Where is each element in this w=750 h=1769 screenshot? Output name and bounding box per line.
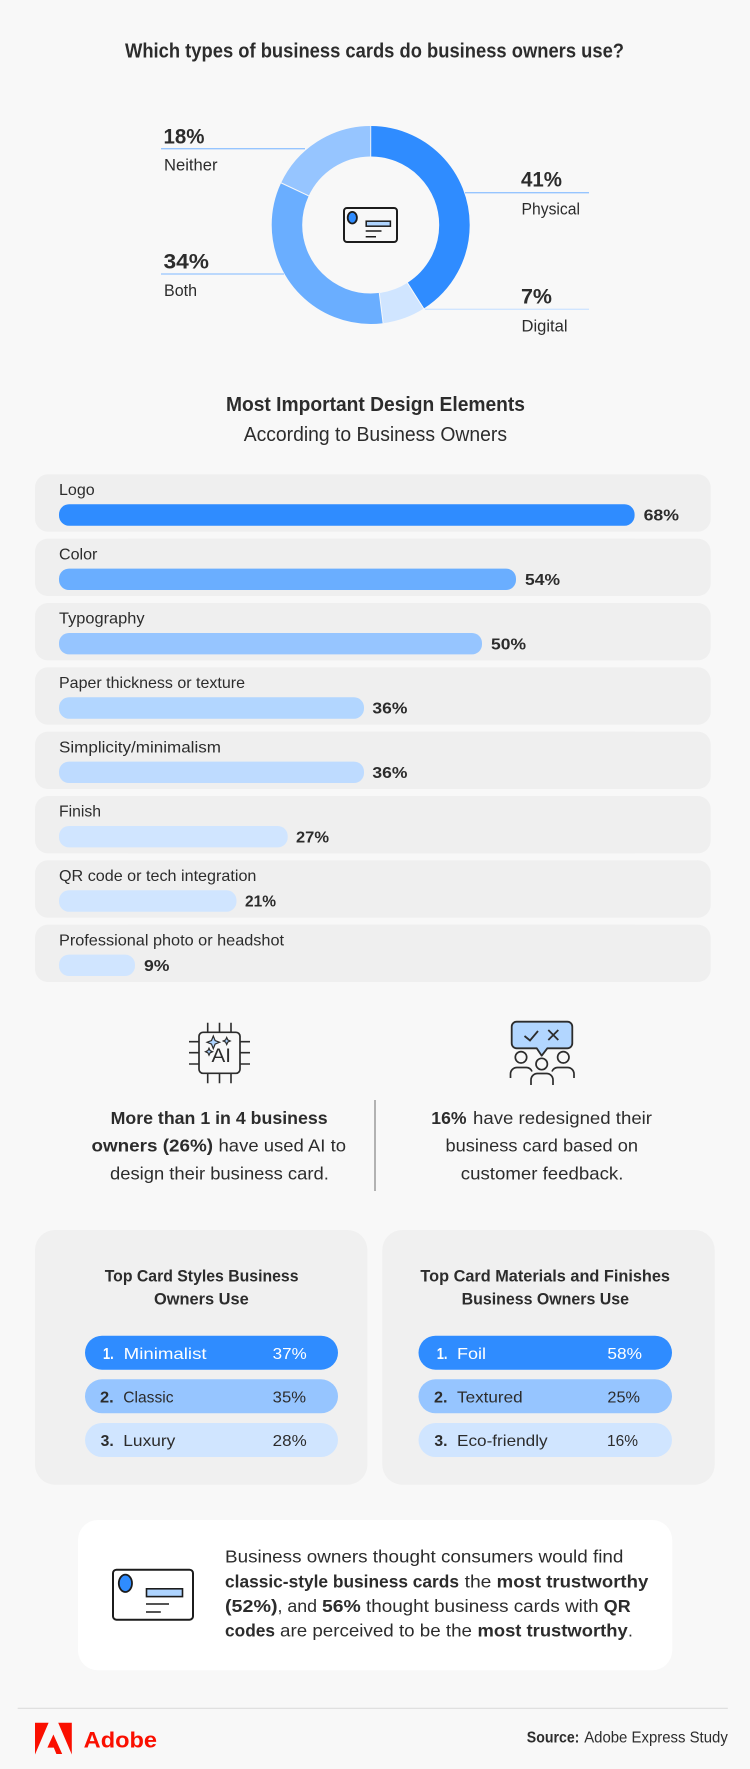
callout: physical 41%: Physical [522,201,580,219]
text block: feedback stat: customer feedback. [461,1163,623,1183]
row: classic 35%: 2. [100,1390,114,1407]
row: QR code 21%: 21% [245,894,276,911]
row: professional photo 9%: 9% [144,958,170,975]
row: textured 25% [418,1379,672,1413]
text block: AI stat: design their business card. [110,1163,329,1183]
callout: digital 7% [425,285,589,335]
row: professional photo 9% [35,925,711,982]
text block: trustworthiness finding: , and [278,1596,317,1616]
text block: feedback stat: have redesigned their [473,1108,652,1128]
row: luxury 28%: Luxury [123,1433,175,1450]
row: logo 68%: 68% [644,508,679,525]
text block: trustworthiness finding: Business owners thought consumers would find [225,1547,623,1567]
row: minimalist 37% [85,1336,338,1370]
row: luxury 28%: 3. [101,1433,114,1450]
logo: Adobe: Adobe [84,1727,157,1752]
text block: AI stat: More than 1 in 4 business [111,1108,328,1128]
row: luxury 28%: 28% [273,1433,307,1450]
segment: digital 7% [287,141,454,309]
bar chart: design elements [35,474,711,982]
text block: trustworthiness finding: most trustworthy [478,1621,628,1641]
panel heading: Top Card Styles Business [105,1267,298,1286]
panel heading [420,1267,670,1308]
source note [527,1730,728,1747]
text block: trustworthiness finding: QR [604,1596,631,1616]
row: luxury 28% [85,1423,338,1457]
row: paper thickness 36%: 36% [372,701,407,718]
title: Which types of business cards do business owners use? [125,40,624,62]
row: minimalist 37%: 1. [103,1346,114,1363]
row: paper thickness 36% [35,667,711,725]
callout panel: trustworthiness [78,1520,672,1670]
row: finish 27%: 27% [296,829,329,846]
row: simplicity 36%: Simplicity/minimalism [59,739,221,756]
callout: neither 18%: 18% [164,125,205,148]
source note: Source: [527,1730,579,1747]
heading: design elements [226,394,525,446]
text block: feedback stat [431,1108,652,1183]
callout: digital 7%: 7% [521,285,552,308]
text block: trustworthiness finding: thought business cards with [366,1596,599,1616]
row: classic 35%: Classic [123,1390,174,1407]
text block: trustworthiness finding: are perceived to be the [280,1621,472,1641]
row: finish 27%: Finish [59,804,101,821]
text block: trustworthiness finding: . [628,1621,633,1641]
heading: design elements: Most Important Design Elements [226,394,525,416]
row: classic 35% [85,1379,338,1413]
callout: both 34% [161,251,284,300]
row: simplicity 36% [35,732,711,789]
segment: both 34% [287,141,454,309]
row: logo 68%: Logo [59,482,95,499]
row: classic 35%: 35% [273,1390,306,1407]
row: typography 50%: Typography [59,611,144,628]
row: QR code 21% [35,860,711,918]
callout: digital 7%: Digital [522,317,568,335]
row: color 54%: 54% [525,572,560,589]
icon: AI chip [189,1023,250,1083]
panel: top card materials and finishes [382,1230,715,1485]
segment: physical 41% [287,141,454,309]
text block: trustworthiness finding: 56% [322,1596,361,1616]
logo: Adobe [35,1723,157,1754]
row: eco-friendly 16%: 16% [607,1433,638,1450]
panel heading [105,1267,298,1308]
text block: trustworthiness finding: codes [225,1621,275,1641]
text block: trustworthiness finding: (52%) [225,1596,278,1616]
row: eco-friendly 16% [418,1423,672,1457]
icon: AI chip: AI [212,1046,231,1067]
row: minimalist 37%: Minimalist [124,1346,207,1363]
row: simplicity 36%: 36% [372,765,407,782]
text block: trustworthiness finding: most trustworthy [497,1571,649,1591]
text block: AI stat: owners (26%) [92,1136,213,1156]
row: color 54% [35,539,711,596]
callout: both 34%: 34% [164,251,209,274]
icon: business card (donut center) [344,208,397,242]
text block: trustworthiness finding: classic-style business cards [225,1571,459,1591]
panel heading: Business Owners Use [462,1289,629,1308]
panel heading: Top Card Materials and Finishes [420,1267,670,1286]
panel heading: Owners Use [154,1289,249,1308]
text block: AI stat: have used AI to [218,1136,346,1156]
row: eco-friendly 16%: Eco-friendly [457,1433,548,1450]
callout: neither 18% [161,125,305,175]
panel: top card styles [35,1230,367,1485]
row: foil 58%: 58% [607,1346,642,1363]
row: typography 50%: 50% [491,636,526,653]
row: textured 25%: 25% [607,1390,640,1407]
row: minimalist 37%: 37% [273,1346,307,1363]
donut chart: business card types [281,126,454,323]
segment: neither 18% [287,141,454,309]
text block: trustworthiness finding [225,1547,649,1641]
row: typography 50% [35,603,711,660]
row: logo 68% [35,474,711,532]
row: eco-friendly 16%: 3. [434,1433,448,1450]
row: finish 27% [35,796,711,853]
text block: AI stat [92,1108,346,1183]
row: foil 58% [418,1336,672,1370]
icon: customer feedback group [510,1022,574,1085]
row: color 54%: Color [59,546,98,563]
row: textured 25%: 2. [434,1390,448,1407]
heading: design elements: According to Business Owners [244,424,507,446]
callout: physical 41% [465,169,589,219]
row: QR code 21%: QR code or tech integration [59,868,256,885]
row: foil 58%: Foil [457,1346,486,1363]
callout: physical 41%: 41% [521,169,562,192]
callout: both 34%: Both [164,282,197,300]
icon: business card [113,1570,193,1620]
text block: feedback stat: 16% [431,1108,467,1128]
source note: Adobe Express Study [584,1730,728,1747]
row: professional photo 9%: Professional photo or headshot [59,932,285,949]
row: foil 58%: 1. [437,1346,448,1363]
row: paper thickness 36%: Paper thickness or texture [59,675,245,692]
callout: neither 18%: Neither [164,157,218,175]
text block: feedback stat: business card based on [446,1136,638,1156]
row: textured 25%: Textured [457,1390,523,1407]
text block: trustworthiness finding: the [465,1571,491,1591]
